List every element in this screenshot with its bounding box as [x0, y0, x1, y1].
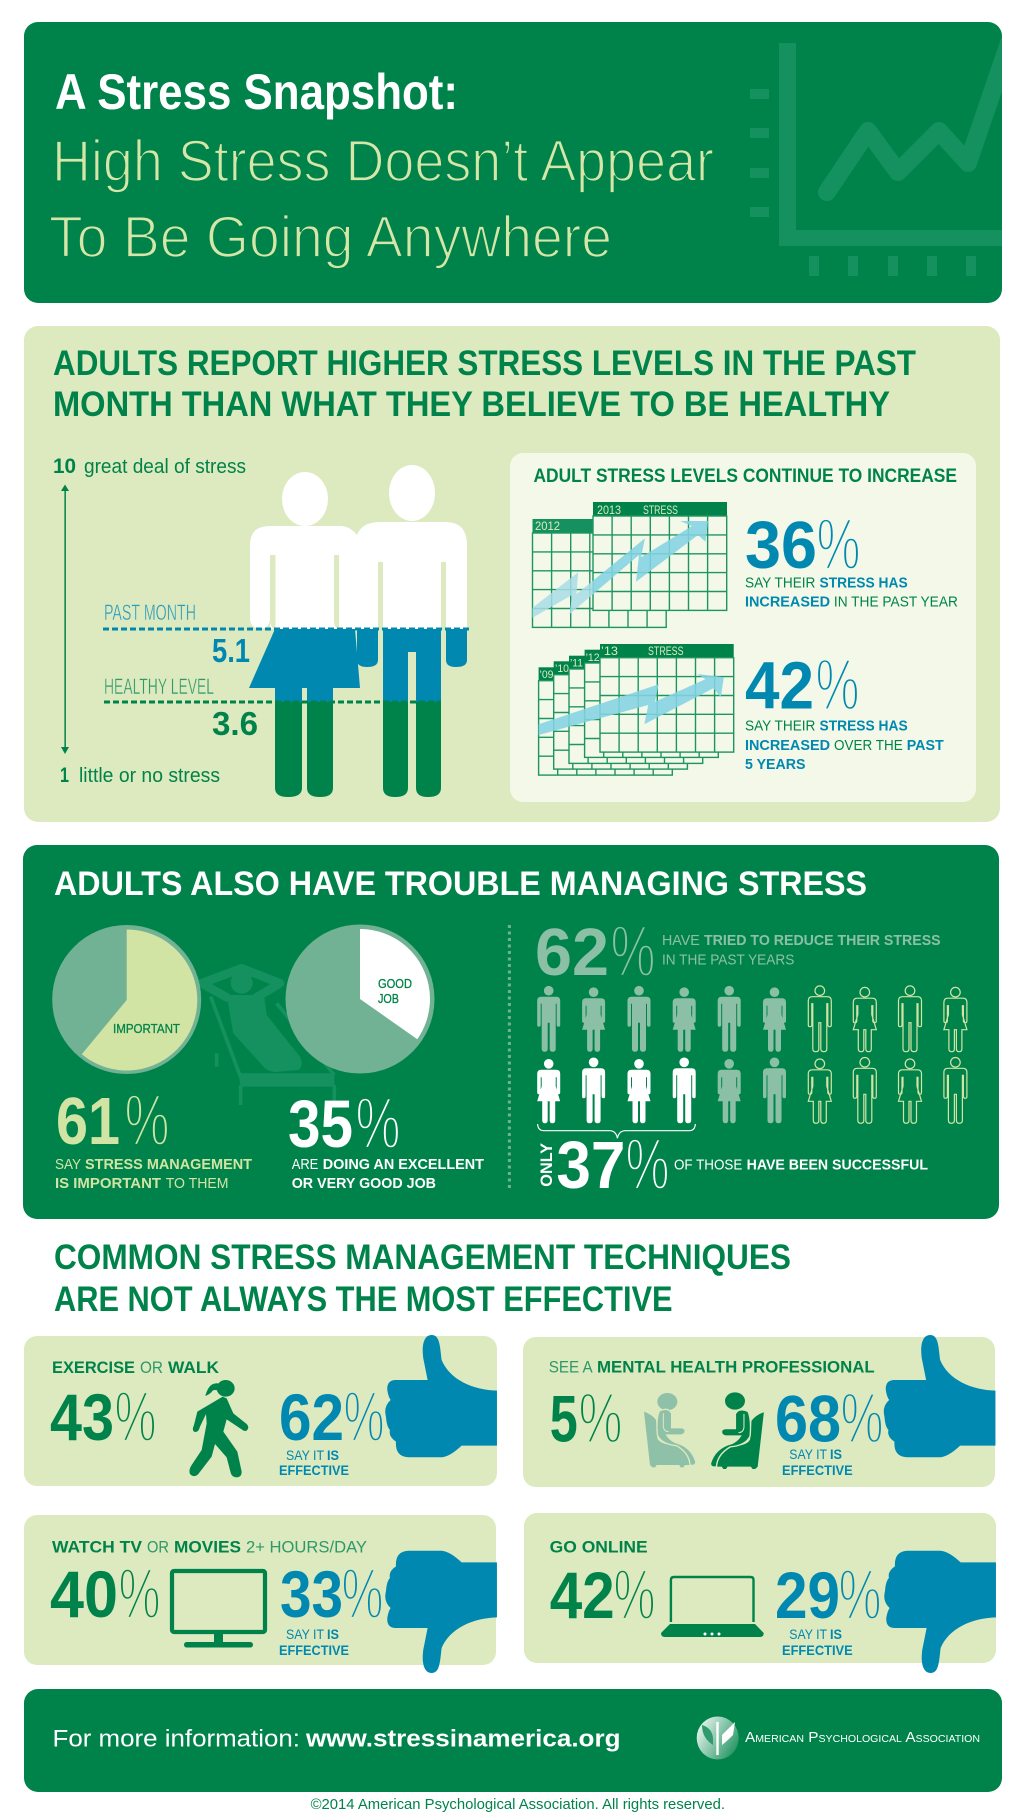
card title: MOVIES	[174, 1538, 241, 1557]
stat: 61 percent: TO THEM	[166, 1175, 228, 1192]
stat: 5 percent: %	[578, 1380, 622, 1459]
panel: exercise or walk	[24, 1335, 497, 1486]
panel: reported stress levels	[24, 326, 1000, 822]
stat: 61 percent: IS IMPORTANT	[55, 1175, 161, 1192]
title	[49, 64, 714, 270]
title: A Stress Snapshot:	[55, 64, 458, 120]
logo: American Psychological Association	[697, 1716, 980, 1760]
heading: ADULTS ALSO HAVE TROUBLE MANAGING STRESS	[54, 865, 867, 903]
card heading: ADULT STRESS LEVELS CONTINUE TO INCREASE	[534, 465, 957, 487]
stat: 61 percent: 61	[56, 1084, 120, 1159]
card title: WATCH TV	[52, 1538, 143, 1557]
card title: EXERCISE	[52, 1358, 135, 1377]
pie chart: 35 percent good job: JOB	[378, 991, 399, 1006]
stat: 61 percent: STRESS MANAGEMENT	[85, 1156, 252, 1173]
stat: 42 percent: 42	[745, 649, 814, 724]
stat: 33 percent effective: SAY IT	[286, 1626, 324, 1642]
icon: 2012 and 2013 calendars with rising arrow	[532, 502, 727, 627]
heading: common techniques: ARE NOT ALWAYS THE MOST EFFECTIVE	[54, 1280, 673, 1319]
icon: person relaxing on lounge chair	[202, 968, 334, 1105]
card title	[52, 1358, 220, 1377]
stat: 29 percent effective	[775, 1556, 882, 1658]
stat: only 37 percent successful: %	[626, 1125, 670, 1205]
stat: 42 percent: 42	[550, 1558, 615, 1632]
stat: 68 percent effective: IS	[830, 1446, 842, 1462]
stat: 42 percent	[550, 1556, 656, 1635]
title: High Stress Doesn’t Appear	[52, 129, 714, 194]
card title: MENTAL HEALTH PROFESSIONAL	[597, 1358, 875, 1377]
stat: 36 percent: IN THE PAST YEAR	[834, 594, 958, 611]
icon: stacked five-year calendars with rising arrow: ’11	[570, 658, 583, 670]
pie chart: 35 percent good job	[286, 924, 434, 1074]
stat: 33 percent effective: 33	[280, 1557, 343, 1631]
stat: 35 percent	[288, 1084, 484, 1192]
heading: MONTH THAN WHAT THEY BELIEVE TO BE HEALTHY	[53, 385, 890, 424]
stat: 42 percent: OVER THE	[834, 737, 903, 754]
stat: 61 percent: SAY	[55, 1156, 81, 1173]
brace under four people	[538, 1124, 695, 1138]
stat: 42 percent: 5 YEARS	[745, 756, 805, 773]
icon: stacked five-year calendars with rising arrow: ’09	[540, 669, 554, 681]
stat: 35 percent: OR VERY GOOD JOB	[292, 1175, 436, 1192]
stat: 62 percent tried to reduce stress: %	[610, 912, 656, 992]
stat: 42 percent	[745, 646, 944, 773]
stat: 68 percent effective	[775, 1380, 884, 1478]
stat: 68 percent effective: EFFECTIVE	[782, 1462, 853, 1478]
stat: 36 percent: %	[816, 505, 860, 585]
stat: 5 percent	[550, 1380, 622, 1459]
stat: 68 percent effective: %	[840, 1380, 884, 1459]
stat: 35 percent: %	[356, 1084, 400, 1164]
stat: 33 percent effective: IS	[327, 1626, 339, 1642]
stat: 62 percent effective	[279, 1378, 384, 1478]
panel: adult stress levels continue to increase	[510, 453, 976, 802]
stat: 62 percent effective: EFFECTIVE	[279, 1462, 349, 1478]
icon: thumbs down	[385, 1551, 497, 1673]
card title: OR	[140, 1358, 163, 1377]
stat: 42 percent: STRESS HAS	[820, 718, 908, 735]
stat: 62 percent tried to reduce stress	[535, 912, 941, 992]
stat: 62 percent tried to reduce stress: TRIED TO REDUCE THEIR STRESS	[704, 932, 941, 949]
stat: 42 percent: %	[614, 1556, 656, 1635]
card title: SEE A	[549, 1358, 593, 1377]
card title: 2+ HOURS/DAY	[246, 1538, 367, 1557]
card title: OR	[147, 1538, 169, 1557]
stat: 61 percent	[55, 1081, 252, 1192]
heading: common techniques	[54, 1238, 791, 1319]
marker: past month 5.1: PAST MONTH	[104, 600, 196, 625]
heading	[53, 344, 916, 424]
icon: background line chart	[750, 40, 1010, 276]
stat: 33 percent effective	[279, 1555, 384, 1658]
scale axis with labels: little or no stress	[79, 765, 220, 787]
panel: header banner	[24, 22, 1010, 303]
icon: stacked five-year calendars with rising arrow: ’13	[601, 644, 618, 658]
panel: trouble managing stress	[23, 845, 999, 1219]
figures: woman and man shaded by stress level	[249, 465, 467, 797]
stat: 36 percent: STRESS HAS	[820, 575, 908, 592]
pictogram: twenty people	[537, 986, 967, 1123]
icon: 2012 and 2013 calendars with rising arrow: 2013	[597, 503, 621, 517]
stat: 43 percent: 43	[50, 1380, 114, 1454]
stat: 42 percent: SAY THEIR	[745, 718, 816, 735]
stat: 68 percent effective: 68	[775, 1382, 841, 1456]
stat: 43 percent	[50, 1378, 156, 1457]
icon: stacked five-year calendars with rising arrow	[539, 644, 734, 775]
stat: 42 percent: INCREASED	[745, 737, 830, 754]
icon: thumbs up	[884, 1335, 995, 1457]
panel: go online	[524, 1513, 996, 1673]
stat: 62 percent effective: %	[344, 1378, 384, 1457]
icon: 2012 and 2013 calendars with rising arrow: 2012	[535, 519, 560, 533]
stat: 40 percent	[50, 1555, 160, 1634]
stat: 62 percent tried to reduce stress: IN THE PAST YEARS	[662, 951, 794, 968]
copyright line: ©2014 American Psychological Association. All rights reserved.	[311, 1796, 725, 1813]
logo: American Psychological Association: American Psychological Association	[745, 1730, 980, 1746]
stat: only 37 percent successful	[537, 1125, 928, 1205]
icon: two people in chairs	[644, 1392, 764, 1469]
more information link text: www.stressinamerica.org	[305, 1726, 620, 1753]
icon: stacked five-year calendars with rising arrow: STRESS	[648, 644, 684, 658]
stat: 35 percent: DOING AN EXCELLENT	[323, 1156, 484, 1173]
scale axis with labels: great deal of stress	[84, 456, 246, 478]
stat: 40 percent: 40	[50, 1557, 118, 1631]
stat: 29 percent effective: IS	[830, 1626, 842, 1642]
stat: 33 percent effective: EFFECTIVE	[279, 1642, 349, 1658]
stat: 62 percent effective: 62	[279, 1380, 344, 1454]
icon: stacked five-year calendars with rising arrow: ’10	[555, 663, 569, 675]
stat: 40 percent: %	[118, 1555, 160, 1634]
heading: common techniques: COMMON STRESS MANAGEMENT TECHNIQUES	[54, 1238, 791, 1277]
stat: 29 percent effective: 29	[775, 1558, 840, 1632]
more information link text: For more information:	[52, 1726, 300, 1753]
marker: healthy level 3.6: HEALTHY LEVEL	[104, 674, 214, 699]
stat: 61 percent: %	[124, 1081, 170, 1161]
icon: thumbs up	[385, 1335, 497, 1457]
stat: 5 percent: 5	[550, 1382, 578, 1456]
icon: laptop	[661, 1577, 764, 1637]
marker: healthy level 3.6: 3.6	[212, 705, 258, 742]
more information link text	[52, 1726, 620, 1753]
scale axis with labels: 1	[60, 764, 69, 787]
heading: ADULTS REPORT HIGHER STRESS LEVELS IN THE PAST	[53, 344, 916, 383]
scale axis with labels: 10	[53, 455, 76, 478]
stat: 36 percent	[745, 505, 958, 611]
stat: 33 percent effective: %	[342, 1555, 384, 1634]
stat: 68 percent effective: SAY IT	[789, 1446, 827, 1462]
marker: healthy level 3.6	[104, 674, 441, 742]
stat: 62 percent tried to reduce stress: HAVE	[662, 932, 700, 949]
stat: 42 percent: %	[816, 646, 860, 726]
scale axis with labels	[53, 455, 246, 787]
icon: stacked five-year calendars with rising arrow: ’12	[586, 652, 600, 664]
stat: 35 percent: 35	[288, 1087, 353, 1162]
stat: only 37 percent successful: HAVE BEEN SUCCESSFUL	[747, 1156, 928, 1173]
stat: only 37 percent successful: ONLY	[537, 1142, 556, 1187]
marker: past month 5.1	[103, 600, 469, 669]
stat: 62 percent effective: IS	[327, 1447, 339, 1463]
panel: watch tv or movies	[24, 1515, 497, 1673]
stat: only 37 percent successful: 37	[556, 1128, 625, 1203]
panel: footer	[24, 1689, 1002, 1792]
stat: 62 percent effective: SAY IT	[286, 1447, 324, 1463]
card title: WALK	[168, 1358, 220, 1377]
stat: 62 percent tried to reduce stress: 62	[535, 915, 609, 990]
icon: thumbs down	[884, 1551, 996, 1673]
icon: 2012 and 2013 calendars with rising arrow: STRESS	[643, 503, 678, 517]
stat: 35 percent: ARE	[292, 1156, 318, 1173]
pie chart: 61 percent important	[52, 925, 201, 1074]
stat: 36 percent: INCREASED	[745, 594, 830, 611]
stat: 42 percent: PAST	[907, 737, 944, 754]
card title	[52, 1538, 367, 1557]
stat: 36 percent: SAY THEIR	[745, 575, 816, 592]
pie chart: 61 percent important: IMPORTANT	[113, 1021, 180, 1036]
stat: 29 percent effective: %	[838, 1556, 882, 1635]
panel: see a mental health professional	[523, 1335, 995, 1487]
pie chart: 35 percent good job: GOOD	[378, 976, 412, 991]
title: To Be Going Anywhere	[49, 205, 612, 270]
stat: 43 percent: %	[114, 1378, 156, 1457]
stat: 29 percent effective: EFFECTIVE	[782, 1642, 853, 1658]
stat: 29 percent effective: SAY IT	[789, 1626, 827, 1642]
icon: television	[172, 1571, 265, 1648]
marker: past month 5.1: 5.1	[212, 632, 250, 669]
icon: walking woman	[189, 1380, 248, 1477]
stat: only 37 percent successful: OF THOSE	[674, 1156, 742, 1173]
card title: GO ONLINE	[550, 1538, 648, 1557]
stat: 36 percent: 36	[745, 508, 817, 583]
